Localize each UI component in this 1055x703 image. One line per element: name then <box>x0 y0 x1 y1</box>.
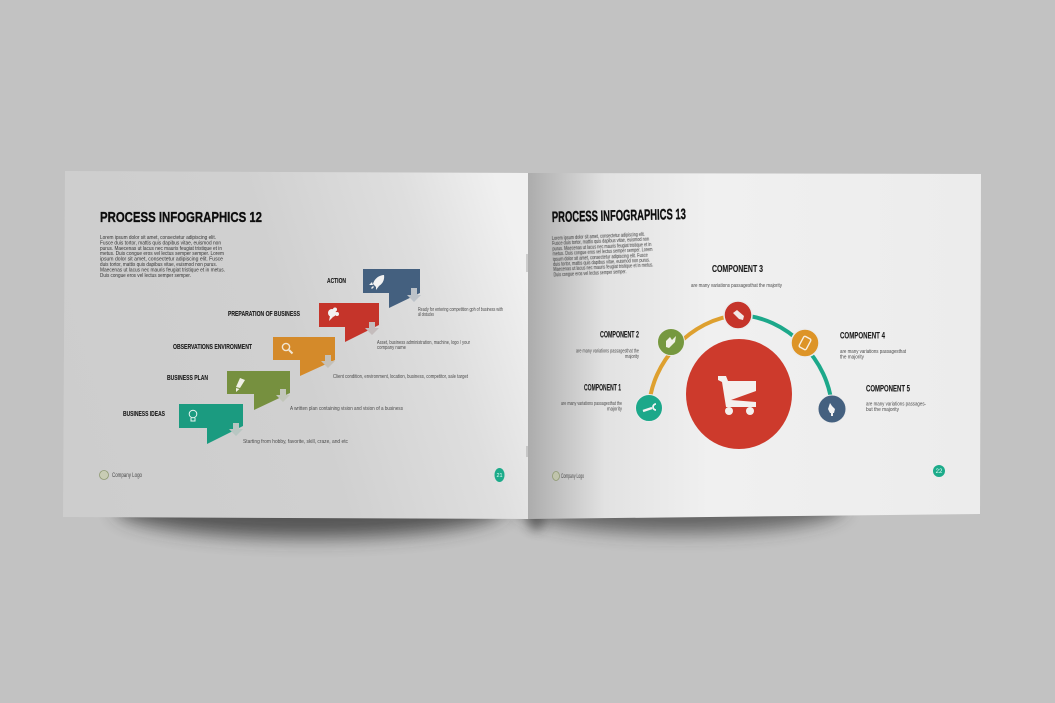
central circle with cart <box>686 339 792 449</box>
panel: left page <box>63 171 528 519</box>
text block: intro left: ipsum dolor sit amet, consectetur adipiscing elit. Fusce <box>100 257 223 263</box>
label: component 5 <box>866 384 926 413</box>
step: observations environment <box>173 337 468 380</box>
node: component 3 <box>724 301 752 329</box>
label: component 3 <box>691 264 782 289</box>
description: preparation: Asset, business administration, machine, logo / your <box>377 340 470 346</box>
label: component 5: are many variations passages- <box>866 402 926 408</box>
step: business ideas <box>123 404 348 445</box>
arc: orange segment <box>649 315 738 408</box>
arrow: observations <box>321 355 335 368</box>
description: preparation: company name <box>377 345 406 351</box>
step: preparation of business <box>228 303 470 351</box>
label: observations environment: OBSERVATIONS ENVIRONMENT <box>173 342 252 351</box>
heading: process infographics 13: PROCESS INFOGRAPHICS 13 <box>552 206 686 226</box>
spine marks <box>526 254 528 457</box>
icon: light bulb <box>189 410 197 421</box>
footer logo right <box>552 472 584 480</box>
text block: intro left: Lorem ipsum dolor sit amet, consectetur adipiscing elit. <box>100 235 216 241</box>
description: preparation <box>377 340 470 351</box>
icon: pin <box>328 308 339 321</box>
node: component 4 <box>791 329 819 357</box>
page number 22 <box>933 465 945 477</box>
label: business plan: BUSINESS PLAN <box>167 373 208 382</box>
panel: right page <box>526 173 981 519</box>
label: component 1: majority <box>607 406 622 412</box>
text block: intro right: metus. Duis congue eros vel lectus semper semper. Lorem <box>553 247 653 258</box>
label: component 2: majority <box>625 354 639 360</box>
icon: wrench <box>643 404 656 411</box>
text block: intro left: Fusce duis tortor, mattis quis dapibus vitae, euismod non <box>100 240 221 246</box>
step: action <box>327 269 503 318</box>
icon: cart <box>718 376 756 415</box>
label: component 2: COMPONENT 2 <box>600 330 639 340</box>
label: component 5: COMPONENT 5 <box>866 384 910 394</box>
footer logo right: Company Logo <box>561 474 584 480</box>
label: component 1 <box>561 382 622 412</box>
text block: intro right <box>552 231 654 278</box>
footer logo left <box>100 470 142 480</box>
description: action: Ready for entering competition gph of business with <box>418 307 503 313</box>
node: component 1 <box>636 394 662 422</box>
arrow: business ideas <box>229 423 243 436</box>
step: business plan <box>167 371 403 412</box>
page number 22: 22 <box>936 469 943 475</box>
description: business plan: A written plan containing vision and vision of a business <box>290 406 403 412</box>
text block: intro right: Maecenas ut lacus nec mauris feugiat tristique et in metus. <box>553 263 654 273</box>
label: component 5: but the majority <box>866 407 899 413</box>
description: action <box>418 307 503 318</box>
label: component 4: are many variations passagesthat <box>840 349 906 355</box>
shadow: spine <box>527 505 545 531</box>
node: component 2 <box>658 328 684 356</box>
node: component 5 <box>818 395 846 423</box>
text block: intro left <box>100 235 225 279</box>
label: business ideas: BUSINESS IDEAS <box>123 409 165 418</box>
label: component 4 <box>840 330 906 360</box>
page number 21: 21 <box>496 473 503 479</box>
description: business ideas: Starting from hobby, favorite, skill, craze, and etc <box>243 439 348 445</box>
text block: intro right: Lorem ipsum dolor sit amet, consectetur adipiscing elit. <box>552 232 645 242</box>
text block: intro right: Duis congue eros vel lectus semper semper. <box>553 269 627 278</box>
arrow: preparation <box>365 322 379 335</box>
label: preparation of business: PREPARATION OF BUSINESS <box>228 309 300 318</box>
footer logo left: Company Logo <box>112 473 142 479</box>
text block: intro right: purus. Maecenas ut lacus nec mauris feugiat tristique et in <box>552 242 651 252</box>
icon: rocket <box>369 275 384 290</box>
description: observations: Client condition, environment, location, business, competitor, sale target <box>333 374 468 380</box>
icon: tool <box>666 336 676 348</box>
label: component 2: are many variations passagesthat the <box>576 348 639 354</box>
icon: pencil <box>236 378 245 392</box>
description: action: all obstacles <box>418 312 434 318</box>
label: component 2 <box>576 330 639 360</box>
text block: intro left: Maecenas ut lacus nec mauris feugiat tristique et in metus. <box>100 267 225 273</box>
arc: teal segment <box>738 315 832 409</box>
icon: marker <box>733 310 744 320</box>
icon: plug <box>828 403 835 416</box>
label: action: ACTION <box>327 276 346 285</box>
text block: intro right: Fusce duis tortor, mattis quis dapibus vitae, euismod non <box>552 237 649 247</box>
page number 21 <box>494 468 504 482</box>
heading: process infographics 12: PROCESS INFOGRAPHICS 12 <box>100 209 262 226</box>
arrow: action <box>407 288 421 302</box>
arrow: business plan <box>276 389 290 402</box>
text block: intro right: duis tortor, mattis quis dapibus vitae, euismod non purus. <box>553 258 650 268</box>
label: component 1: are many variations passagesthat the <box>561 401 622 407</box>
label: component 3: are many variations passagesthat the majority <box>691 283 782 289</box>
icon: magnifier <box>282 343 292 354</box>
text block: intro left: Duis congue eros vel lectus semper semper. <box>100 273 191 279</box>
label: component 4: the majority <box>840 354 864 360</box>
text block: intro left: purus. Maecenas ut lacus nec mauris feugiat tristique et in <box>100 246 222 252</box>
label: component 3: COMPONENT 3 <box>712 264 763 275</box>
shadow: left page <box>115 478 505 538</box>
text block: intro left: duis tortor, mattis quis dapibus vitae, euismod non purus. <box>100 262 217 268</box>
icon: phone <box>799 336 811 350</box>
text block: intro left: metus. Duis congue eros vel lectus semper semper. Lorem <box>100 251 224 257</box>
label: component 1: COMPONENT 1 <box>584 382 621 392</box>
text block: intro right: ipsum dolor sit amet, consectetur adipiscing elit. Fusce <box>553 252 648 263</box>
shadow: right page <box>515 479 845 533</box>
label: component 4: COMPONENT 4 <box>840 330 885 342</box>
